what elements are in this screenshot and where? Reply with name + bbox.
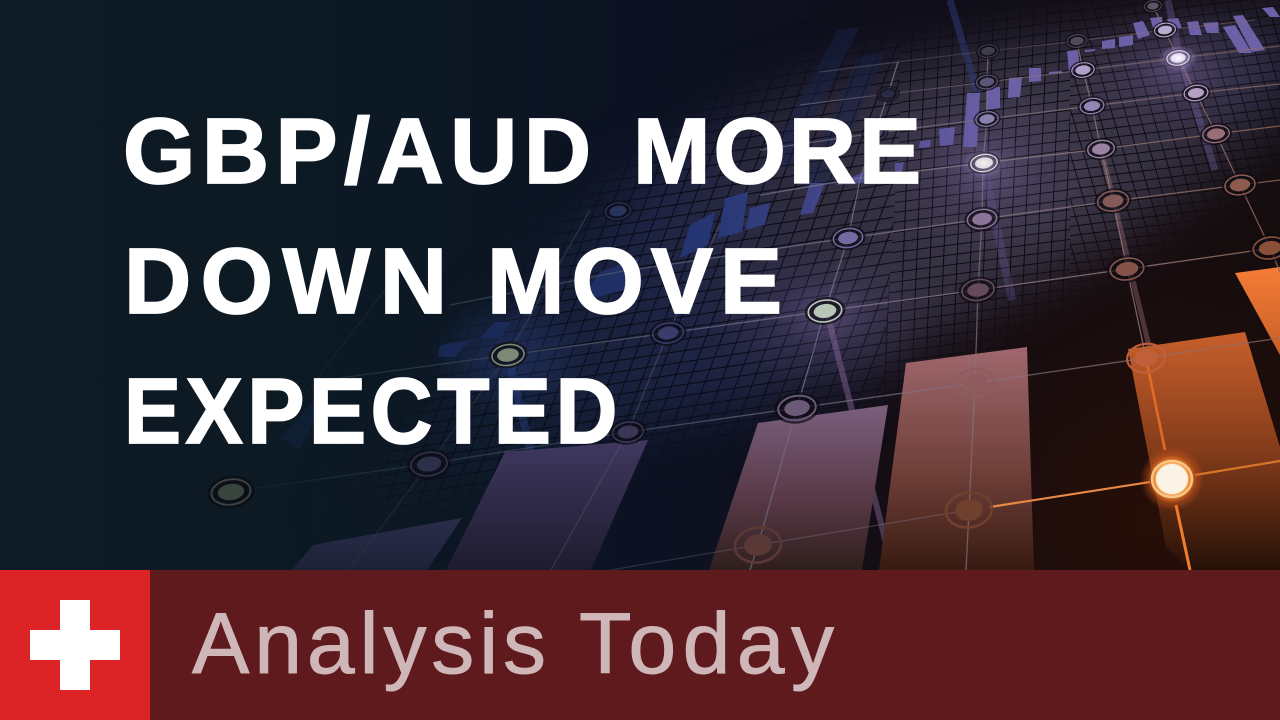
red logo square with white cross <box>0 570 150 720</box>
network nodes <box>205 0 1280 565</box>
footer label: Today <box>579 596 834 692</box>
background <box>0 0 1280 570</box>
title: DOWN <box>124 229 447 333</box>
perspective grid floor <box>384 0 1280 496</box>
network lines <box>160 6 1280 590</box>
footer bar <box>0 570 1280 720</box>
glow behind bright nodes <box>430 0 1280 415</box>
title: GBP/AUD <box>123 99 591 203</box>
footer label <box>192 596 834 692</box>
title: EXPECTED <box>124 359 622 463</box>
candlestick chart <box>280 7 1280 450</box>
bright orange node <box>1140 447 1204 511</box>
title: MORE <box>633 99 921 203</box>
title <box>123 99 921 463</box>
footer label: Analysis <box>192 596 546 692</box>
light beams <box>508 0 1215 570</box>
title: MOVE <box>487 229 782 333</box>
bar chart: orange and purple columns <box>292 267 1280 570</box>
dark tall background bars <box>762 27 885 190</box>
